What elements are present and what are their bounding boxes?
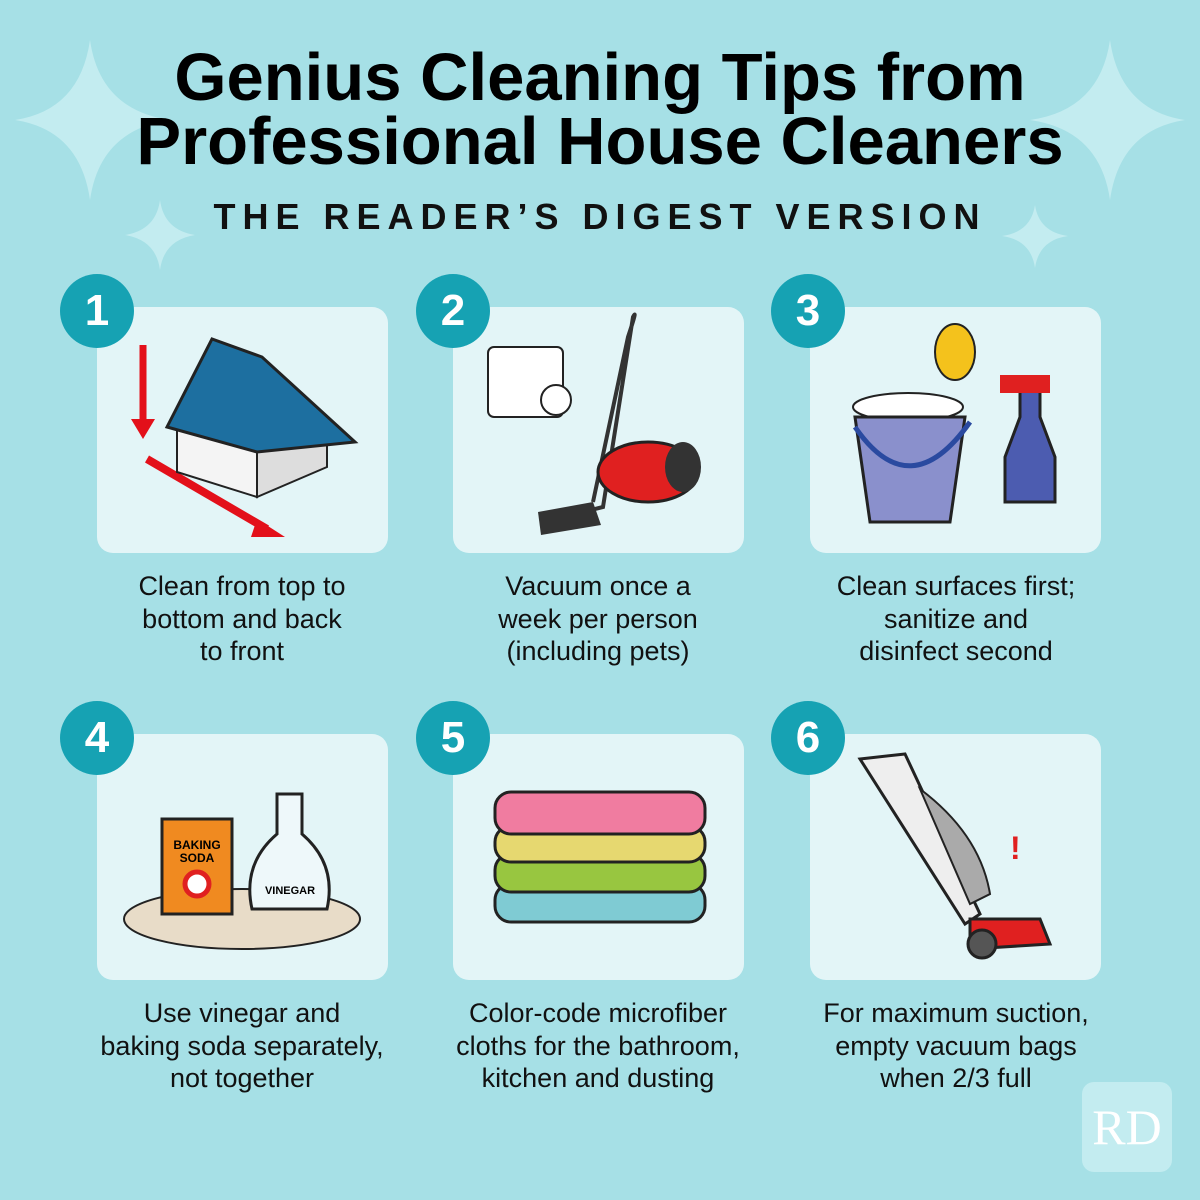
number 3 (771, 274, 845, 348)
subtitle: THE READER’S DIGEST VERSION (213, 196, 987, 237)
card 3 (810, 307, 1101, 553)
number 3: 3 (796, 286, 820, 335)
caption 5: kitchen and dusting (482, 1063, 714, 1093)
title: Genius Cleaning Tips from (174, 40, 1026, 115)
number 2 (416, 274, 490, 348)
caption 1: bottom and back (142, 604, 342, 634)
caption 5 (456, 998, 740, 1093)
caption 1: to front (200, 636, 284, 666)
card 6 (810, 734, 1101, 980)
caption 6: empty vacuum bags (835, 1030, 1077, 1060)
card 4: VINEGAR (265, 885, 315, 897)
number 4 (60, 701, 134, 775)
logo: RD (1082, 1082, 1172, 1172)
caption 6: For maximum suction, (823, 998, 1089, 1028)
caption 5: cloths for the bathroom, (456, 1030, 740, 1060)
number 1: 1 (85, 286, 109, 335)
caption 4: baking soda separately, (100, 1030, 384, 1060)
caption 3: disinfect second (859, 636, 1053, 666)
caption 3: sanitize and (884, 604, 1028, 634)
number 6 (771, 701, 845, 775)
caption 2 (498, 571, 698, 666)
caption 2: Vacuum once a (505, 571, 691, 601)
card 5 (453, 734, 744, 980)
caption 1: Clean from top to (138, 571, 346, 601)
number 2: 2 (441, 286, 465, 335)
caption 4: Use vinegar and (144, 998, 340, 1028)
logo: RD: RD (1092, 1099, 1162, 1155)
caption 5: Color-code microfiber (469, 998, 727, 1028)
number 4: 4 (85, 713, 109, 762)
title (136, 40, 1064, 179)
decorative sparkles (16, 41, 1184, 269)
caption 6: when 2/3 full (880, 1063, 1032, 1093)
number 5: 5 (441, 713, 465, 762)
card 1 (97, 307, 388, 553)
title: Professional House Cleaners (136, 104, 1064, 179)
caption 3 (837, 571, 1075, 666)
caption 6 (823, 998, 1089, 1093)
card 6: ! (1010, 830, 1021, 866)
card 4: BAKING (173, 838, 221, 852)
caption 2: (including pets) (506, 636, 690, 666)
caption 4 (100, 998, 384, 1093)
number 6: 6 (796, 713, 820, 762)
caption 4: not together (170, 1063, 314, 1093)
caption 1 (138, 571, 346, 666)
card 4: SODA (180, 851, 215, 865)
caption 2: week per person (498, 604, 698, 634)
caption 3: Clean surfaces first; (837, 571, 1075, 601)
card 4 (97, 734, 388, 980)
card 2 (453, 307, 744, 553)
number 1 (60, 274, 134, 348)
number 5 (416, 701, 490, 775)
